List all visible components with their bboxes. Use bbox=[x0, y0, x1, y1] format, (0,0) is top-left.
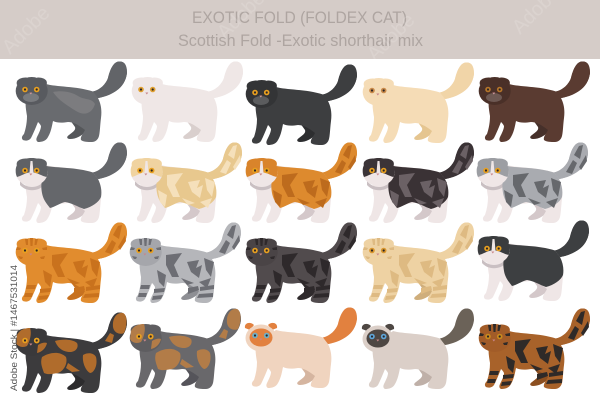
cat: silver tabby bicolor bbox=[477, 142, 588, 223]
title: EXOTIC FOLD (FOLDEX CAT) bbox=[192, 8, 407, 27]
subtitle: Scottish Fold -Exotic shorthair mix bbox=[178, 31, 423, 50]
cat: black bicolor bbox=[478, 220, 589, 301]
cat: cream tabby bicolor bbox=[131, 142, 242, 223]
cat: blue bicolor bbox=[16, 142, 127, 223]
cat: seal colorpoint bbox=[362, 308, 474, 389]
cat: black tabby bicolor bbox=[363, 142, 474, 223]
cat: flame colorpoint bbox=[245, 307, 357, 388]
cat: white solid bbox=[132, 61, 243, 142]
cat: red tabby bbox=[16, 222, 127, 303]
cat: cream tabby bbox=[363, 222, 474, 303]
header band bbox=[0, 0, 600, 59]
cat: chocolate solid bbox=[479, 61, 590, 142]
cat: silver tabby bbox=[130, 222, 241, 303]
cat: red tabby bicolor bbox=[246, 142, 357, 223]
cat: brown tabby bbox=[479, 308, 590, 389]
cat: black tabby bbox=[246, 222, 357, 303]
cat: black solid bbox=[246, 64, 357, 145]
stock id label: Adobe Stock | #1467531014 bbox=[9, 265, 20, 391]
watermarks: Adobe bbox=[363, 9, 419, 66]
cat: blue solid bbox=[16, 61, 127, 142]
watermarks bbox=[0, 0, 564, 66]
cat: cream solid bbox=[363, 62, 474, 143]
cat: black tortoiseshell bbox=[16, 312, 127, 393]
cat: blue tortoiseshell bbox=[130, 308, 241, 389]
